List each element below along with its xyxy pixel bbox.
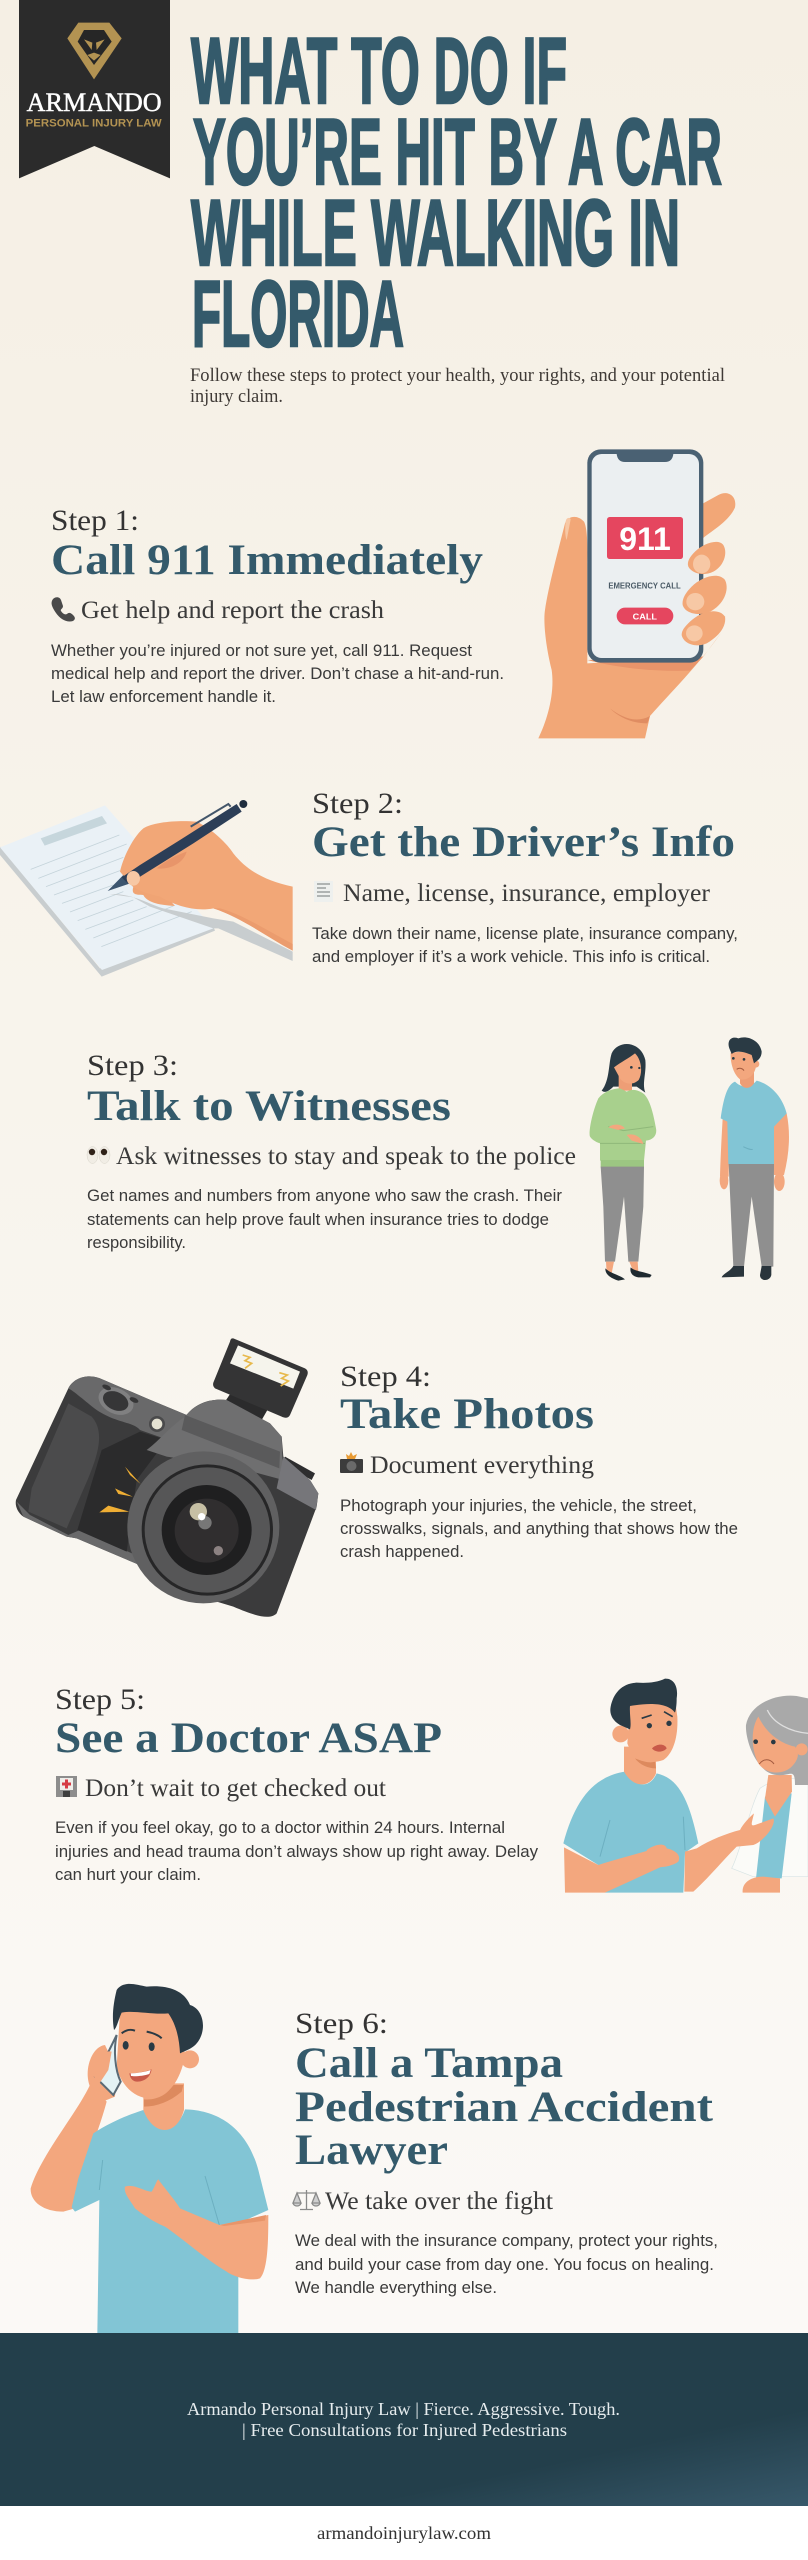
panel: step 5: Even if you feel okay, go to a doctor within 24 hours. Internal — [55, 1819, 505, 1837]
panel: step 6: Call a Tampa — [295, 2040, 563, 2087]
icon: receipt — [314, 881, 333, 902]
icon: hospital — [56, 1776, 77, 1797]
logo banner: PERSONAL INJURY LAW — [26, 118, 162, 130]
panel: step 5: injuries and head trauma don’t always show up right away. Delay — [55, 1843, 539, 1861]
panel: step 2: Take down their name, license plate, insurance company, — [312, 925, 738, 943]
panel: step 4: Step 4: — [340, 1360, 431, 1393]
logo banner — [19, 0, 170, 178]
illustration: patient and doctor — [563, 1679, 808, 1893]
illustration: hand holding phone — [538, 449, 735, 738]
intro text: Follow these steps to protect your health, your rights, and your potential — [190, 366, 725, 386]
panel: step 1: Whether you’re injured or not sure yet, call 911. Request — [51, 642, 472, 660]
illustration: hand holding phone: EMERGENCY CALL — [608, 581, 681, 590]
panel: step 1: Let law enforcement handle it. — [51, 688, 276, 706]
intro text: injury claim. — [190, 387, 283, 407]
panel: step 5: Don’t wait to get checked out — [85, 1775, 386, 1802]
illustration: two witnesses — [590, 1037, 789, 1281]
panel: step 6: We deal with the insurance company, protect your rights, — [295, 2232, 718, 2250]
illustration: hand writing on paper — [0, 800, 293, 977]
title: FLORIDA — [192, 261, 404, 366]
woman witness — [590, 1044, 656, 1281]
icon: telephone — [52, 597, 75, 622]
panel: step 6: and build your case from day one. You focus on healing. — [295, 2256, 714, 2274]
panel: step 2: and employer if it’s a work vehicle. This info is critical. — [312, 948, 710, 966]
panel: step 2 — [312, 787, 738, 966]
panel: step 2: Name, license, insurance, employer — [343, 880, 711, 907]
footer band — [0, 2333, 808, 2506]
panel: step 2: Get the Driver’s Info — [312, 819, 735, 866]
panel: step 3: Talk to Witnesses — [87, 1083, 451, 1130]
footer text: | Free Consultations for Injured Pedestrians — [242, 2420, 567, 2440]
title — [191, 18, 722, 366]
panel: step 4: Document everything — [370, 1452, 594, 1479]
panel: step 3: statements can help prove fault when insurance tries to dodge — [87, 1211, 549, 1229]
panel: step 3 — [87, 1049, 576, 1252]
panel: step 3: Get names and numbers from anyone who saw the crash. Their — [87, 1187, 563, 1205]
man witness — [720, 1037, 789, 1280]
panel: step 4: crash happened. — [340, 1543, 464, 1561]
panel: step 5: Step 5: — [55, 1683, 145, 1716]
panel: step 6: We take over the fight — [325, 2188, 553, 2215]
panel: step 6: Step 6: — [295, 2007, 388, 2040]
panel: step 5: can hurt your claim. — [55, 1866, 201, 1884]
panel: step 1 — [51, 504, 504, 706]
footer text — [187, 2399, 620, 2440]
panel: step 1: Step 1: — [51, 504, 139, 537]
icon: balance scales — [293, 2190, 320, 2210]
illustration: man on the phone — [31, 1984, 268, 2333]
panel: step 1: medical help and report the driver. Don’t chase a hit-and-run. — [51, 665, 504, 683]
panel: step 4 — [340, 1360, 738, 1561]
panel: step 3: Ask witnesses to stay and speak to the police — [116, 1143, 576, 1170]
icon: eyes — [87, 1146, 110, 1164]
panel: step 6 — [293, 2007, 718, 2297]
panel: step 2: Step 2: — [312, 787, 403, 820]
panel: step 4: Take Photos — [340, 1391, 594, 1438]
illustration: hand holding phone: CALL — [633, 611, 658, 621]
panel: step 1: Get help and report the crash — [81, 597, 385, 624]
panel: step 1: Call 911 Immediately — [51, 537, 484, 584]
panel: step 4: crosswalks, signals, and anything that shows how the — [340, 1520, 738, 1538]
panel: step 5: See a Doctor ASAP — [55, 1715, 442, 1762]
panel: step 4: Photograph your injuries, the vehicle, the street, — [340, 1497, 697, 1515]
illustration: hand holding phone: 911 — [619, 521, 671, 557]
footer text: Armando Personal Injury Law | Fierce. Aggressive. Tough. — [187, 2399, 620, 2419]
panel: step 3: Step 3: — [87, 1049, 178, 1082]
panel: step 3: responsibility. — [87, 1234, 186, 1252]
panel: step 6: We handle everything else. — [295, 2279, 497, 2297]
intro text — [190, 366, 725, 407]
logo banner: ARMANDO — [27, 87, 162, 117]
website url: armandoinjurylaw.com — [317, 2523, 491, 2543]
icon: camera with flash — [340, 1452, 363, 1473]
panel: step 6: Lawyer — [295, 2127, 448, 2174]
illustration: camera — [16, 1338, 318, 1617]
panel: step 5 — [55, 1683, 539, 1884]
panel: step 6: Pedestrian Accident — [295, 2084, 714, 2131]
